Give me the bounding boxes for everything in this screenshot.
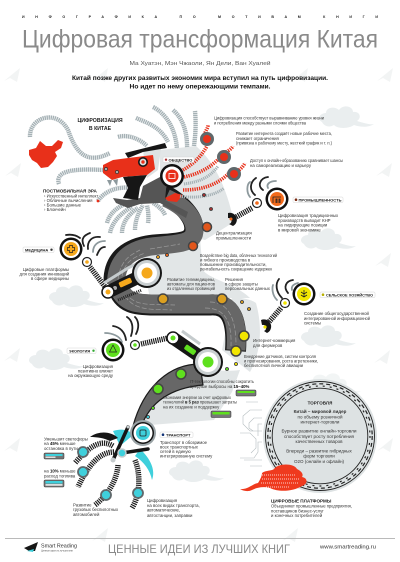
society nodes: [200, 132, 241, 181]
lead text: Китай позже других развитых экономик мира вступил на путь цифровизации.: [72, 74, 328, 82]
text: transport: сетей в единую: [160, 449, 191, 454]
upper joint arm: [102, 258, 162, 298]
text: data protection: [225, 277, 271, 291]
footer brand: [41, 544, 77, 552]
text: transport: интегрированную систему: [160, 454, 213, 458]
lower joint arm: [167, 331, 223, 377]
text: post-mobile era: ПОСТМОБИЛЬНАЯ ЭРА: [43, 188, 98, 194]
text: data protection: персональных данных: [225, 286, 271, 291]
text: sensors: Внедрение датчиков, систем контроля: [244, 354, 317, 359]
bar: energy: [211, 411, 231, 418]
eye: [138, 157, 148, 167]
text: industry: Цифровизация традиционных: [278, 213, 339, 218]
dragon belly: [140, 146, 260, 425]
text: post-mobile era: › Блокчейн: [44, 207, 66, 212]
neck: [113, 177, 188, 218]
title: Цифровая трансформация Китая: [22, 26, 378, 54]
text: transport: Уменьшит светофоры: [44, 436, 88, 442]
text: industry: производств выводит КНР: [278, 218, 331, 223]
tracks: [75, 443, 113, 463]
black jaw: [123, 175, 147, 200]
text: digital platforms: поставщиков бизнес-услуг: [271, 508, 324, 514]
text: medicine: в сфере медицины: [31, 276, 69, 281]
bar: emissions: [236, 390, 256, 396]
panel: trade circle: интернет-торговли: [301, 420, 340, 424]
limb: industry: [228, 177, 288, 226]
text: big data: рентабельность сокращение издержек: [200, 266, 272, 272]
text: transport: на всех видах транспорта,: [147, 503, 200, 508]
text: emissions: [190, 379, 255, 389]
limb: ecology: [102, 317, 168, 362]
text: transport: [44, 436, 213, 518]
section title: digitalization in China: [77, 118, 123, 132]
text: energy: Экономия энергии за счет цифровых: [163, 395, 232, 400]
text: emissions: IT-технологии способны сократить: [190, 379, 255, 384]
text: sensors: [244, 354, 318, 368]
teeth: [107, 179, 118, 186]
panel: trade circle: [263, 379, 377, 493]
text: transport: остановка в пути: [44, 446, 78, 451]
text: society: на самореализацию и карьеру: [250, 163, 312, 168]
text: telemedicine: Развитие телемедицины,: [167, 277, 215, 282]
text: ecology: [68, 364, 114, 378]
label: agriculture: СЕЛЬСКОЕ ХОЗЯЙСТВО: [326, 292, 373, 297]
text: transport: автостанции, заправки: [147, 513, 193, 518]
label: society: ОБЩЕСТВО: [168, 157, 192, 162]
small nodes: [78, 447, 143, 500]
label: medicine: [23, 247, 54, 252]
text: ecology: на окружающую среду: [68, 373, 114, 378]
panel: trade circle: Бурное развитие онлайн-торговли: [282, 428, 357, 434]
text: telemedicine: из отдаленных провинций: [167, 286, 216, 291]
circuit traces: [240, 402, 262, 466]
text: transport: всех транспортных: [160, 444, 199, 450]
lead text: Но идет по нему опережающими темпами.: [130, 84, 271, 90]
label: ecology: [67, 348, 96, 354]
footer logo: [24, 542, 38, 552]
limb: transport: [75, 420, 156, 508]
dragon head: [103, 143, 188, 218]
footer url: www.smartreading.ru: [319, 544, 376, 550]
text: data protection: Решения: [225, 277, 244, 282]
limb: medicine: [60, 233, 106, 288]
society whiskers: [180, 125, 245, 197]
authors: Ма Хуатэн, Мэн Чжаоли, Ян Дели, Ван Хуалей: [130, 60, 270, 67]
decorative clouds: [29, 106, 374, 482]
text: transport: автомобилей: [73, 512, 100, 517]
text: agriculture: для фермеров: [253, 343, 283, 348]
text: industry: в мировой экономике: [278, 228, 321, 232]
text: big data: повышение производительности,: [200, 262, 267, 267]
text: energy: на их создание и поддержку: [163, 404, 220, 410]
red tail piece: [165, 193, 183, 202]
footer brand: Ценные идеи из лучших книг: [41, 550, 73, 552]
text: industry: промышленности: [216, 236, 252, 240]
text: big data: и гибкого производства в: [200, 258, 251, 262]
panel: trade circle: Впереди – развитие гибридных: [286, 448, 353, 454]
map of China: [29, 140, 63, 168]
bars: transport: [44, 453, 64, 487]
text: post-mobile era: [43, 188, 98, 212]
dragon body: [113, 193, 236, 427]
text: society: снижает ограничения: [236, 136, 280, 141]
text: sensors: и прогнозирования, роста агротехники,: [244, 358, 318, 364]
panel: trade circle: форм торговли: [303, 454, 335, 458]
text: medicine: Цифровые платформы: [23, 267, 69, 272]
text: transport: грузовых беспилотных: [73, 507, 119, 512]
text: society: (привязка к рабочему месту, жесткий график и т. п.): [236, 140, 333, 146]
text: post-mobile era: › Облачные вычисления: [44, 198, 93, 203]
label: industry: ПРОМЫШЛЕННОСТЬ: [298, 197, 342, 202]
panel: trade circle: качественных товаров: [296, 439, 343, 444]
text: digital platforms: [271, 498, 352, 518]
text: transport: Транспорт в обозримое: [160, 440, 208, 445]
panel: trade circle: ТОРГОВЛЯ: [308, 400, 332, 406]
text: society: и потребления между разными слоями общества: [214, 120, 307, 126]
cyan crescents: [113, 430, 133, 446]
text: agriculture: [253, 311, 371, 348]
text: industry: Децентрализация: [216, 230, 252, 236]
text: post-mobile era: › Искусственный интеллект: [44, 194, 98, 198]
icon: society: [160, 164, 184, 188]
red snout: [103, 155, 155, 180]
text: transport: Развитие: [73, 502, 92, 508]
text: post-mobile era: › Большие данные: [44, 202, 82, 208]
dragon hair strands: [30, 107, 196, 233]
text: agriculture: системы: [304, 320, 321, 326]
levers: [113, 427, 148, 460]
red cloud: [240, 464, 306, 491]
text: energy: [163, 395, 237, 410]
icon: transport: [130, 420, 156, 446]
panel: trade circle: способствует росту потребления: [284, 434, 355, 439]
text: ecology: позитивно влияет: [78, 368, 113, 374]
text: big data: Воздействие big data, облачных технологий: [200, 253, 278, 258]
text: medicine: [19, 267, 70, 281]
whisker tip: [97, 200, 99, 202]
text: agriculture: интегрированной информационной: [304, 316, 371, 321]
text: telemedicine: [167, 277, 216, 291]
text: emissions: вредные выбросы на 15–40%: [190, 384, 249, 389]
footer slogan: ЦЕННЫЕ ИДЕИ ИЗ ЛУЧШИХ КНИГ: [108, 542, 290, 556]
tiny dots: [146, 194, 250, 418]
footer brand: Smart Reading: [41, 544, 77, 550]
text: digital platforms: ЦИФРОВЫЕ ПЛАТФОРМЫ: [271, 498, 332, 504]
panel: trade circle: Китай – мировой лидер: [294, 408, 347, 414]
label: medicine: МЕДИЦИНА: [25, 247, 48, 252]
panel: trade circle: O2O (онлайн и офлайн): [294, 458, 345, 464]
text: transport: на 10% меньше: [44, 468, 76, 474]
supertitle: ИНФОГРАФИКА ПО МОТИВАМ КНИГИ: [22, 15, 378, 19]
text: society: Цифровизация способствует выравниванию уровня жизни: [214, 116, 325, 120]
text: ecology: Цифровизация: [83, 364, 114, 369]
text: transport: на 45% меньше: [44, 441, 76, 446]
text: industry: на лидирующие позиции: [278, 222, 328, 228]
label: ecology: ЭКОЛОГИЯ: [69, 349, 90, 353]
text: transport: автоматические,: [147, 508, 180, 512]
black horn: [125, 143, 167, 158]
text: energy: технологий в 5 раз превышает затраты: [163, 400, 237, 404]
nostrils: [104, 167, 119, 174]
footer line: [5, 537, 395, 540]
lead text: [72, 74, 328, 90]
text: transport: Цифровизация: [147, 498, 178, 503]
text: digital platforms: и конечных потребителей: [271, 513, 323, 518]
text: digital platforms: Объединяют промышленные предприятия,: [271, 504, 352, 508]
text: big data: [200, 253, 278, 272]
text: society: [214, 116, 343, 168]
limb: agriculture: [261, 279, 316, 333]
track teeth under arm: [118, 290, 142, 300]
section title: digitalization in China: ЦИФРОВИЗАЦИЯ: [77, 118, 123, 124]
text: industry: [216, 213, 339, 240]
label: transport: ТРАНСПОРТ: [166, 432, 191, 437]
text: agriculture: Интернет-коммерция: [253, 338, 296, 343]
text: telemedicine: автоматы для пациентов: [167, 282, 216, 286]
text: agriculture: Создание общегосударственной: [304, 311, 369, 316]
text: sensors: беспилотной личной авиации: [244, 363, 304, 368]
body nodes: [153, 222, 249, 394]
text: society: Развитие интернета создаёт новые рабочие места,: [236, 131, 332, 136]
panel: trade circle: по объему розничной: [298, 414, 343, 420]
text: data protection: в сфере защиты: [225, 282, 258, 286]
text: medicine: для создания инноваций: [19, 272, 70, 276]
label: transport: [160, 432, 193, 438]
section title: digitalization in China: В КИТАЕ: [89, 126, 112, 132]
text: society: Доступ к онлайн-образованию сравнивает шансы: [250, 158, 343, 163]
back of head: [143, 149, 161, 178]
text: transport: расход топлива: [44, 474, 76, 478]
